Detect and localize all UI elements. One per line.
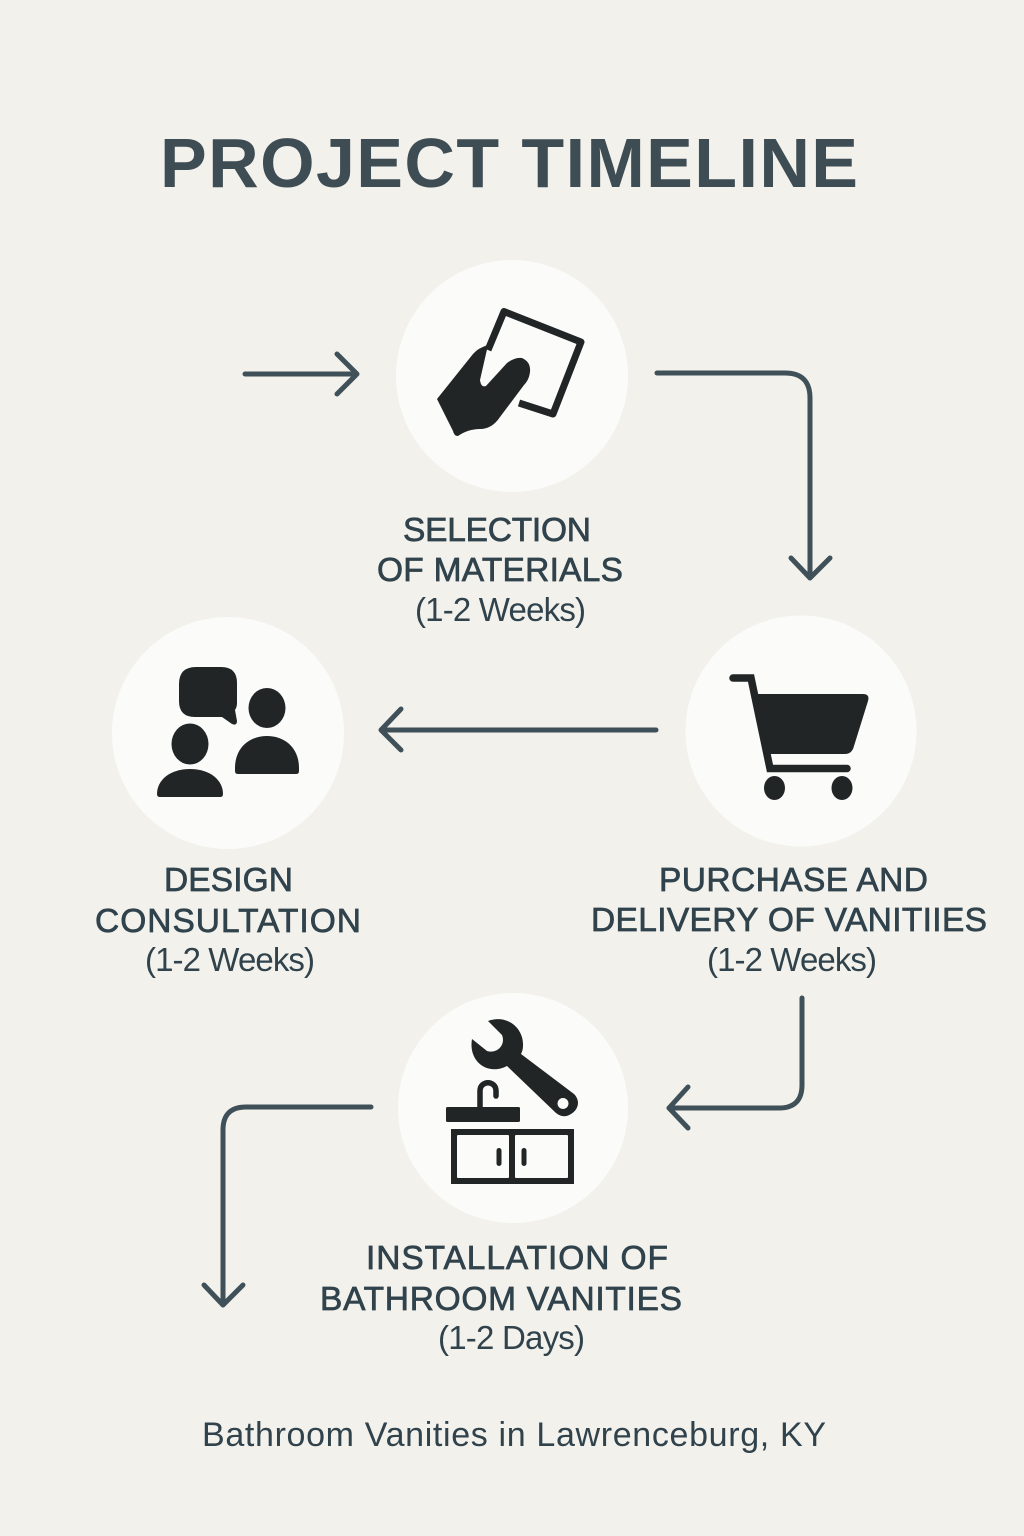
- icon: shopping cart: [733, 678, 868, 800]
- label: purchase and delivery: PURCHASE AND: [659, 862, 928, 899]
- label: design consultation: (1-2 Weeks): [145, 941, 315, 978]
- icon: hand holding material swatch: [437, 312, 581, 436]
- step: purchase and delivery: [591, 616, 987, 978]
- label: purchase and delivery: (1-2 Weeks): [707, 941, 877, 978]
- circle: selection of materials: [396, 260, 628, 492]
- step: design consultation: [95, 617, 361, 978]
- footer text: Bathroom Vanities in Lawrenceburg, KY: [202, 1416, 826, 1454]
- label: design consultation: [95, 862, 361, 978]
- title: PROJECT TIMELINE: [160, 124, 858, 202]
- label: purchase and delivery: [591, 862, 987, 978]
- step: selection of materials: [377, 260, 628, 628]
- label: installation: [320, 1240, 682, 1356]
- label: selection of materials: OF MATERIALS: [377, 552, 623, 589]
- arrow: entry to selection of materials: [245, 354, 357, 394]
- circle: installation: [398, 993, 628, 1223]
- label: installation: INSTALLATION OF: [366, 1240, 668, 1277]
- arrow: selection to purchase: [657, 373, 830, 578]
- label: selection of materials: (1-2 Weeks): [415, 591, 586, 628]
- arrow: purchase to design consultation: [381, 709, 656, 750]
- step: installation: [320, 993, 682, 1356]
- circle: design consultation: [112, 617, 344, 849]
- label: purchase and delivery: DELIVERY OF VANITIIES: [591, 902, 987, 939]
- label: selection of materials: SELECTION: [403, 512, 591, 549]
- arrow: installation to completion: [204, 1107, 371, 1305]
- icon: people in consultation: [157, 667, 299, 797]
- label: installation: (1-2 Days): [438, 1319, 585, 1356]
- label: design consultation: CONSULTATION: [95, 903, 361, 940]
- label: design consultation: DESIGN: [164, 862, 293, 899]
- arrow: purchase to installation: [669, 998, 802, 1128]
- label: installation: BATHROOM VANITIES: [320, 1281, 682, 1318]
- label: selection of materials: [377, 512, 623, 628]
- icon: wrench and vanity cabinet: [446, 1019, 578, 1184]
- circle: purchase and delivery: [686, 616, 916, 846]
